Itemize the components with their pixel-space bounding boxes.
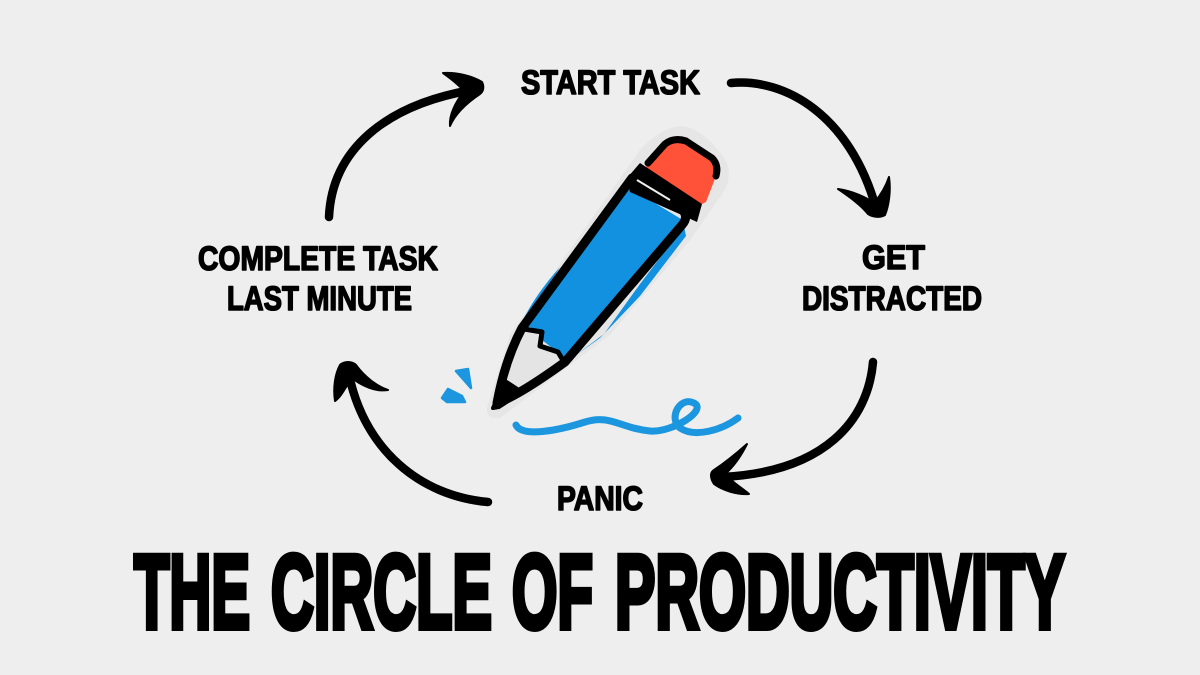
zigzag edge of wood — [524, 329, 564, 362]
icon: pencil — [487, 126, 729, 418]
label: get distracted — [802, 239, 982, 318]
title: CIRCLE — [271, 534, 492, 651]
ferrule — [627, 163, 702, 222]
label: complete task last minute: COMPLETE TASK — [198, 240, 438, 278]
label: complete task last minute: LAST MINUTE — [227, 280, 412, 318]
blue smudge behind pencil — [522, 226, 686, 358]
pencil halo — [487, 126, 729, 418]
blue pencil body — [524, 188, 686, 358]
title: THE — [134, 534, 250, 651]
eraser — [645, 139, 717, 210]
arrow: get distracted to panic — [711, 362, 873, 494]
wooden tip — [493, 327, 563, 408]
arrow: complete task to start task — [329, 73, 483, 217]
label: start task: START TASK — [521, 64, 700, 102]
label: panic: PANIC — [557, 480, 643, 518]
eraser outline — [648, 140, 717, 176]
label: get distracted: GET — [862, 239, 925, 277]
label: complete task last minute — [198, 240, 438, 318]
icon: blue splash marks — [442, 369, 471, 402]
graphite point — [493, 381, 522, 408]
pencil outline — [497, 178, 686, 403]
arrow: start task to get distracted — [731, 83, 890, 217]
title — [134, 534, 1065, 651]
arrow: panic to complete task — [334, 362, 488, 502]
icon: blue pencil squiggle — [516, 402, 738, 433]
title: OF — [512, 534, 593, 651]
label: get distracted: DISTRACTED — [802, 280, 982, 318]
